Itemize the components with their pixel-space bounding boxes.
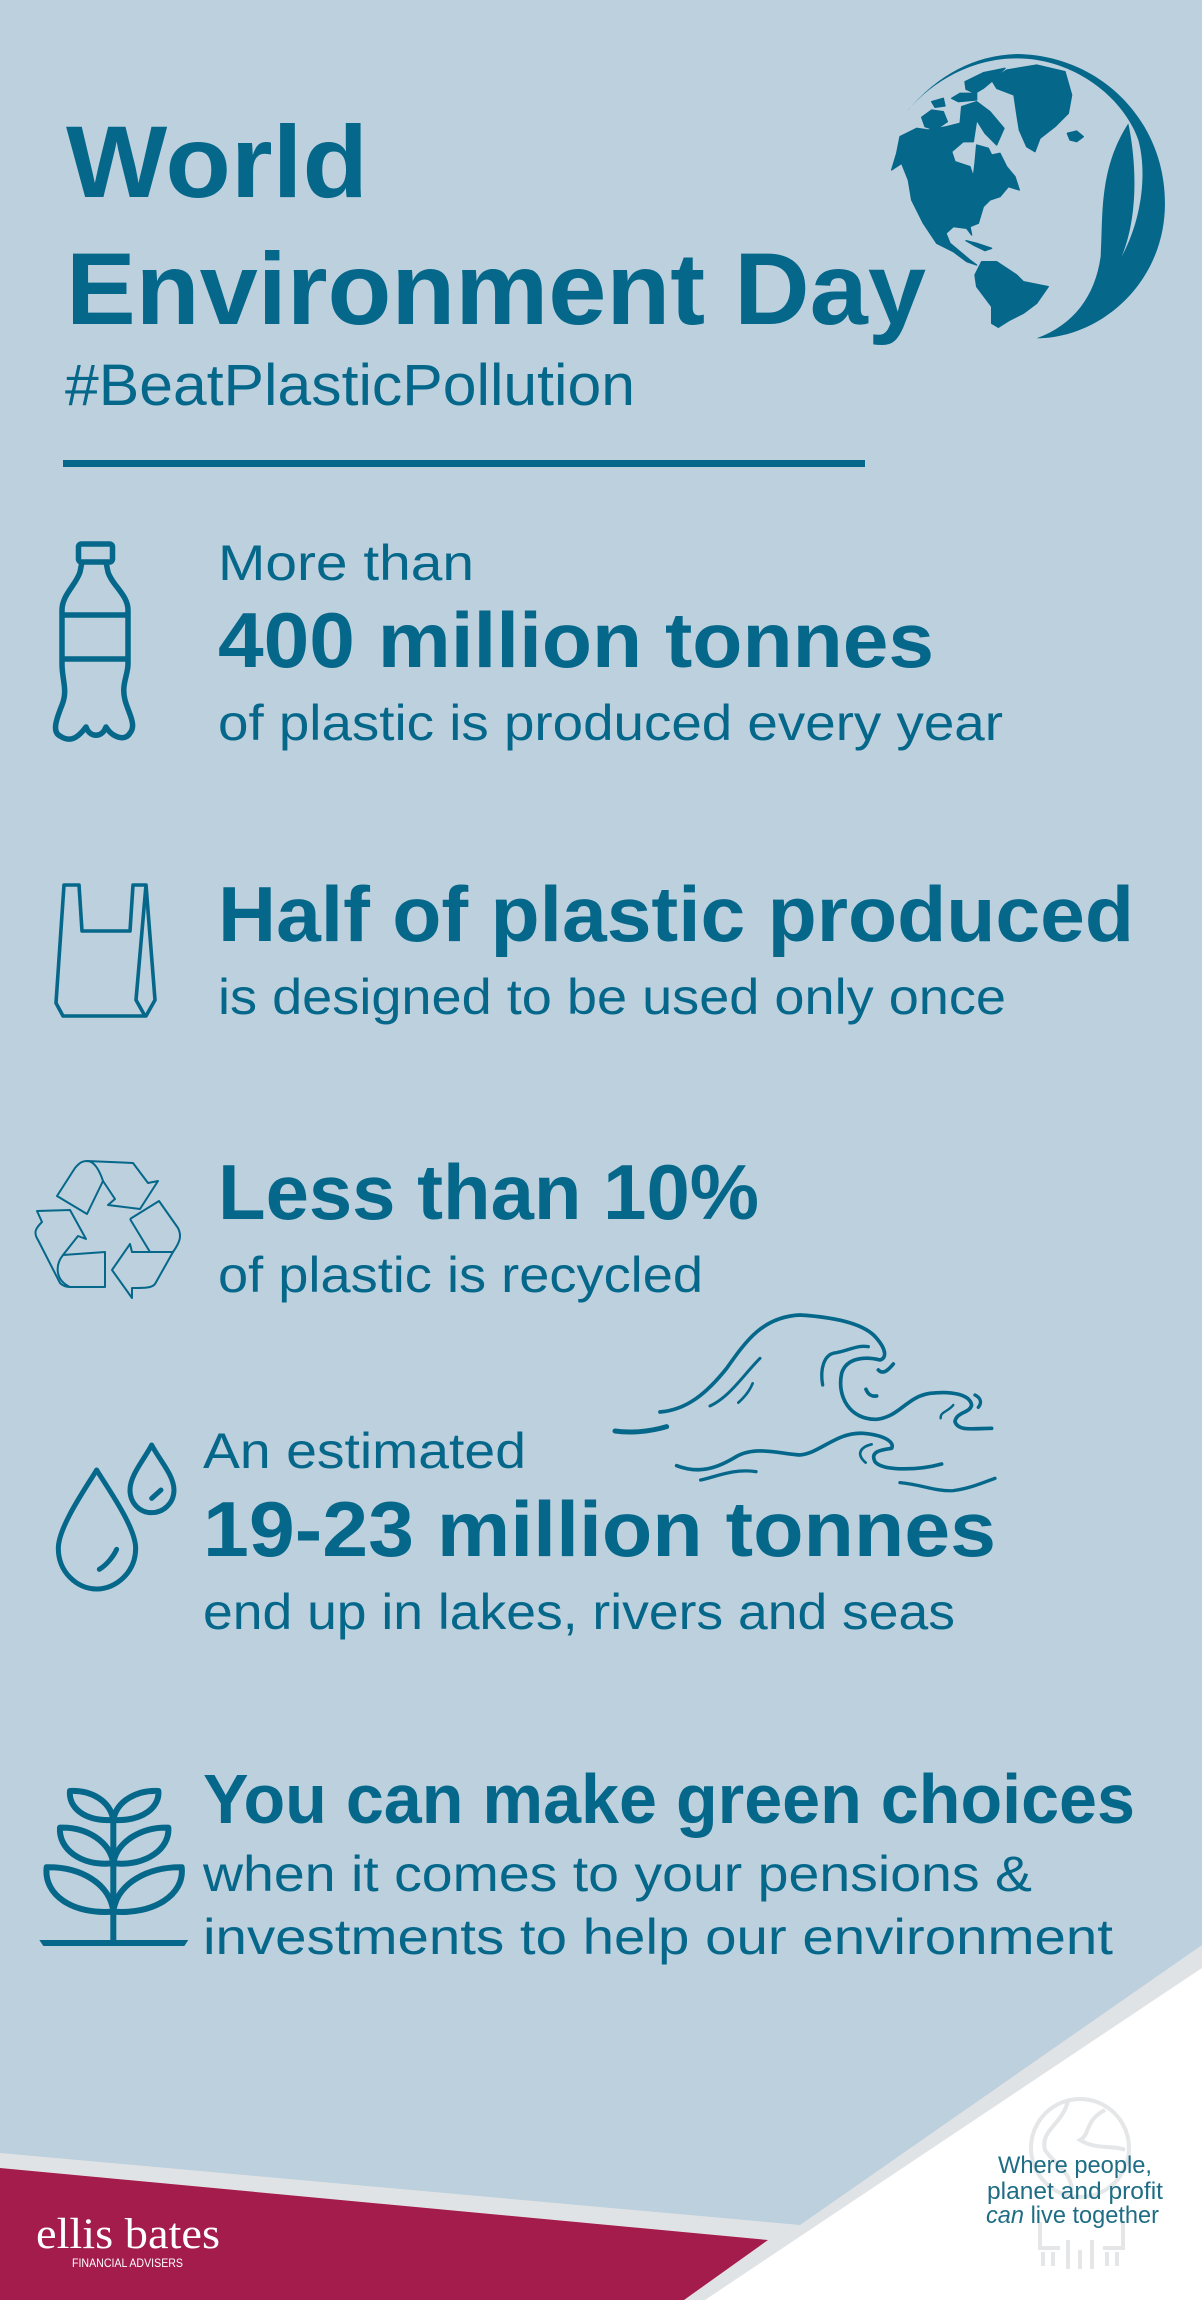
stat: half of plastic: Half of plastic produced bbox=[218, 870, 1134, 958]
tagline: Where people, bbox=[998, 2152, 1152, 2179]
stat: green choices: when it comes to your pensions & bbox=[202, 1846, 1032, 1902]
stat: half of plastic: is designed to be used only once bbox=[218, 969, 1006, 1025]
stat: green choices: investments to help our environment bbox=[203, 1909, 1113, 1965]
stat: 400 million tonnes: More than bbox=[218, 535, 474, 591]
footer bands bbox=[0, 1945, 1202, 2300]
icon: wave bbox=[615, 1315, 995, 1491]
caribbean bbox=[966, 241, 992, 251]
icon: water drops bbox=[58, 1445, 174, 1589]
stat: 400 million tonnes: 400 million tonnes bbox=[218, 596, 934, 684]
icon: faint globe and people bbox=[1031, 2099, 1129, 2269]
icon: recycling arrows bbox=[35, 1161, 180, 1298]
crescent and leaf bbox=[907, 54, 1165, 338]
tagline bbox=[986, 2152, 1163, 2229]
stat: 400 million tonnes: of plastic is produced every year bbox=[218, 695, 1003, 751]
tagline: can live together bbox=[986, 2202, 1159, 2229]
logo: ellis bates: ellis bates bbox=[36, 2211, 220, 2258]
stat: less than 10% bbox=[218, 1148, 759, 1303]
heading rule bbox=[63, 460, 865, 467]
greenland bbox=[992, 65, 1072, 152]
stat: 19-23 million tonnes: end up in lakes, rivers and seas bbox=[203, 1584, 955, 1640]
stat: green choices bbox=[202, 1760, 1135, 1965]
icon: globe with leaf bbox=[892, 54, 1165, 338]
icon: plant bbox=[39, 1791, 188, 1946]
logo: ellis bates: FINANCIAL ADVISERS bbox=[72, 2256, 183, 2270]
stat: less than 10%: of plastic is recycled bbox=[218, 1247, 703, 1303]
title: World bbox=[66, 105, 368, 219]
tagline: planet and profit bbox=[987, 2178, 1163, 2205]
title: Environment Day bbox=[66, 232, 926, 346]
arctic islands bbox=[922, 68, 1005, 145]
stat: 19-23 million tonnes: 19-23 million tonnes bbox=[203, 1485, 996, 1573]
south america bbox=[975, 262, 1048, 327]
stat: less than 10%: Less than 10% bbox=[218, 1148, 759, 1236]
title bbox=[66, 105, 926, 346]
stat: green choices: You can make green choices bbox=[203, 1760, 1135, 1838]
icon: plastic bottle bbox=[56, 544, 133, 739]
hashtag: #BeatPlasticPollution bbox=[65, 353, 635, 418]
icon: plastic bag bbox=[56, 885, 155, 1016]
iceland bbox=[1067, 131, 1083, 142]
north america bbox=[892, 123, 1019, 265]
stat: 19-23 million tonnes bbox=[203, 1423, 996, 1640]
stat: 400 million tonnes bbox=[218, 535, 1003, 751]
stat: 19-23 million tonnes: An estimated bbox=[203, 1423, 526, 1479]
stat: half of plastic bbox=[218, 870, 1134, 1025]
